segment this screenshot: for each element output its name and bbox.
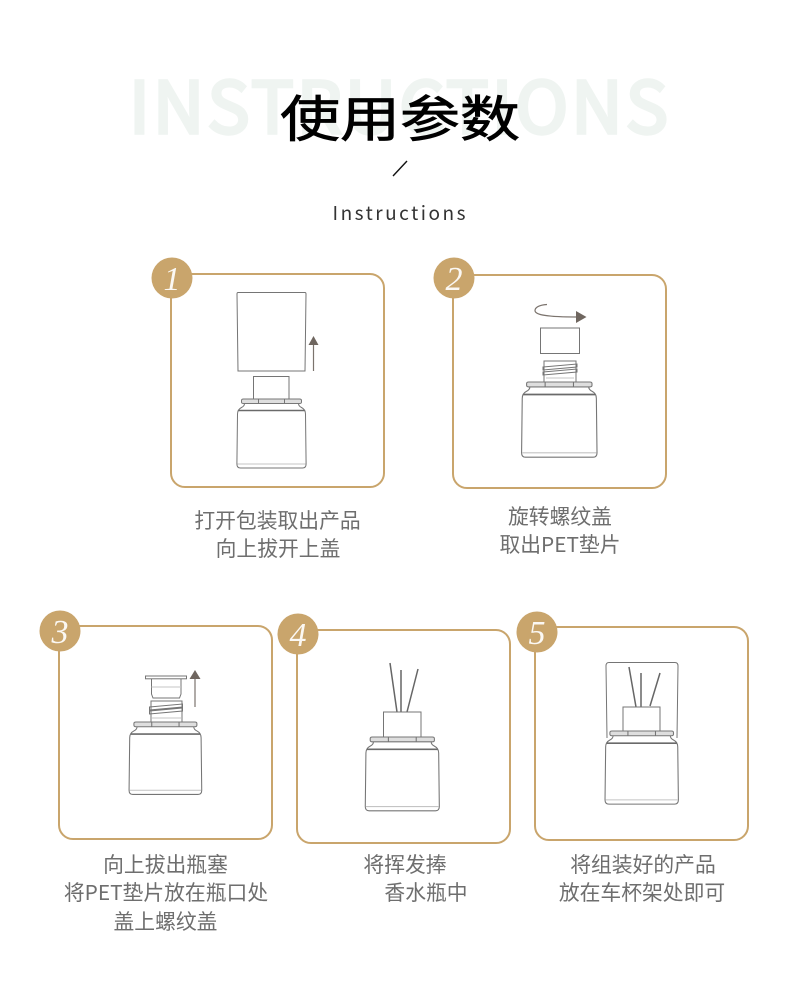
step 4 caption [363,848,468,906]
step 2 caption: 旋转螺纹盖 [508,500,612,530]
icon: outer case [606,662,678,738]
step 4 caption: 将挥发捧 [363,848,447,878]
background watermark: INSTRUCTIONS: INSTRUCTIONS [129,52,668,154]
panel: step 3 [40,610,272,935]
step 1 badge [152,258,192,298]
step 5 caption: 放在车杯架处即可 [559,876,725,906]
step 3 caption: 向上拔出瓶塞 [103,848,228,878]
step 3 badge: 3 [50,614,68,651]
icon: screw cap [540,328,580,354]
icon: bottle [237,399,306,468]
icon: threaded neck [150,701,182,722]
title: 使用参数 [280,79,520,151]
panel: step 5 [516,612,748,906]
step 2 caption: 取出PET垫片 [499,528,621,558]
step 5 badge: 5 [528,615,546,652]
icon: bottle [522,382,597,457]
step 5 card [535,627,748,840]
panel: step 4 [278,614,510,906]
icon: bottle [129,722,202,794]
step 1 badge: 1 [164,261,180,298]
icon: stopper [146,676,186,698]
panel: step 2 [434,258,666,558]
step 1 card [171,274,384,487]
step 5 caption [559,848,725,906]
arrow: up [308,336,318,371]
icon: threaded neck [543,361,577,382]
step 3 caption: 盖上螺纹盖 [114,905,217,935]
icon: inner cap [254,376,289,399]
step 2 card [453,275,666,488]
step 2 badge [434,258,474,298]
step 4 caption: 香水瓶中 [384,876,468,906]
step 3 caption: 将PET垫片放在瓶口处 [64,876,268,906]
icon: reed sticks [390,663,418,712]
step 4 card [297,630,510,843]
icon: cap [623,707,660,731]
step 2 caption [499,500,621,558]
step 4 badge: 4 [290,617,306,654]
step 5 caption: 将组装好的产品 [570,848,716,878]
subtitle: Instructions [332,199,466,226]
icon: reed sticks [629,667,660,707]
step 3 card [59,626,272,839]
icon: cap [384,712,421,737]
icon: outer cap lifted [237,292,306,371]
step 2 badge: 2 [446,261,462,298]
slash divider [393,161,407,176]
step 4 badge [278,614,318,654]
arrow: up [190,670,200,707]
step 1 caption [194,504,361,562]
step 1 caption: 向上拔开上盖 [216,532,340,562]
step 3 caption [64,848,268,935]
step 3 badge [40,610,80,652]
icon: bottle [605,731,678,804]
panel: step 1 [152,258,384,562]
step 5 badge [516,612,558,652]
icon: bottle [365,737,439,811]
arrow: rotate [535,304,586,323]
step 1 caption: 打开包装取出产品 [194,504,361,534]
